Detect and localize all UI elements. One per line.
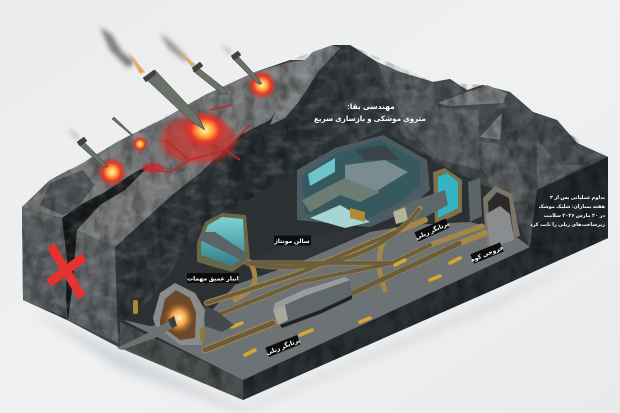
yellow markers — [232, 258, 460, 355]
label: lower rail launcher: پرتابگر ریلی — [265, 336, 301, 357]
lava cracks — [150, 105, 250, 172]
rock texture light — [22, 45, 608, 343]
right dark face — [493, 157, 608, 290]
grey rock facet — [440, 108, 480, 170]
heading — [314, 102, 426, 123]
right pillar — [468, 178, 482, 222]
left cut wall — [22, 207, 75, 318]
dark top-left shade — [40, 170, 95, 215]
side note: زیرساخت‌های ریلی را ثابت کرد — [530, 222, 605, 228]
big missile — [146, 70, 205, 130]
missiles — [77, 51, 262, 167]
wall below ridge — [115, 150, 230, 335]
left teal bay — [197, 213, 250, 272]
side note — [530, 195, 606, 228]
portal missile — [117, 316, 177, 350]
label: upper rail launcher: پرتابگر ریلی — [414, 220, 450, 241]
light ridge streak — [270, 45, 340, 125]
portal arch — [153, 283, 205, 345]
right teal portal — [433, 168, 462, 225]
underground hall — [117, 130, 530, 380]
crack on top — [62, 165, 150, 230]
central control room — [297, 135, 430, 228]
small missile — [112, 117, 133, 135]
crack glow — [142, 163, 164, 173]
label: assembly hall: سالن مونتاژ — [273, 238, 310, 245]
right mountain face — [350, 45, 608, 247]
big impact — [160, 116, 236, 164]
missile three — [232, 54, 262, 84]
left impact — [97, 157, 127, 187]
rail tracks — [205, 208, 485, 355]
scarred top surface — [22, 62, 290, 247]
label: ammo depot — [187, 273, 239, 283]
base front-left face — [120, 320, 243, 400]
exit arch — [483, 186, 520, 248]
right impact — [247, 70, 277, 100]
small impact — [132, 136, 148, 152]
rubble pile — [203, 305, 234, 332]
smoke trails — [67, 27, 232, 139]
crack in left wall — [62, 218, 77, 320]
lower train — [273, 277, 352, 328]
light wedge facet — [480, 113, 502, 140]
heading: متروی موشکی و بازسازی سریع — [314, 114, 426, 123]
assembly hall floor — [245, 228, 370, 272]
soldier left — [133, 300, 138, 314]
missile two — [193, 66, 228, 94]
cave interior dark — [120, 130, 530, 380]
grey top facet — [437, 85, 507, 106]
side note: هفته بمباران: شلیک موشک — [539, 204, 606, 210]
red X mark — [49, 246, 84, 297]
floor — [123, 222, 530, 380]
side note: در ۲۰ مارس ۲۰۲۶ سلامت — [544, 213, 605, 219]
flame trails — [128, 50, 196, 74]
dark central wall — [117, 45, 395, 330]
far right facet — [537, 140, 585, 190]
upper train — [393, 190, 448, 224]
label: mountain exit: خروجی کوه — [470, 244, 505, 264]
side note: تداوم عملیاتی پس از ۳ — [550, 195, 605, 201]
missile four — [78, 140, 108, 167]
rubble — [486, 206, 514, 248]
label: ammo depot: انبار عمیق مهمات — [187, 276, 239, 282]
impact explosions — [97, 70, 277, 187]
heading: مهندسی بقا: — [347, 102, 395, 111]
label: assembly hall — [273, 236, 311, 246]
lower grey facet — [480, 142, 530, 205]
mid grey facet — [377, 62, 480, 170]
base front-right face — [243, 238, 608, 400]
soldier right — [200, 328, 205, 341]
ground shadow — [30, 250, 600, 412]
